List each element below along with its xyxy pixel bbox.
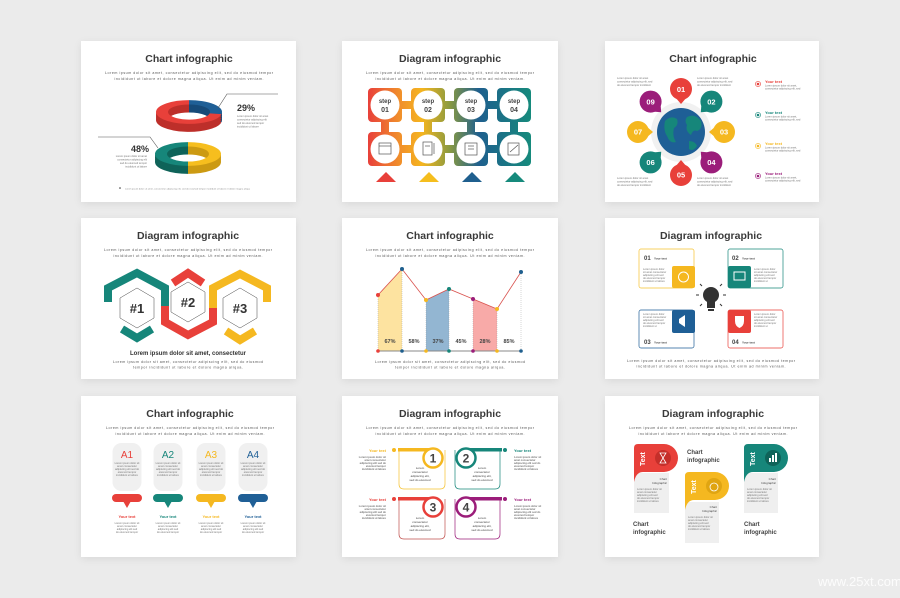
box 2: Lorem bbox=[478, 466, 487, 470]
body text: Lorem ipsum dolor sit amet, consectetur adipiscing elit, sed do eiusmod tempor bbox=[627, 359, 796, 363]
slide 7: A1-A4 chart bbox=[81, 396, 296, 557]
gray columns bbox=[634, 473, 778, 543]
box 1: Lorem bbox=[416, 466, 425, 470]
box 04: do eiusmod tempor bbox=[754, 321, 776, 325]
column A1 bbox=[112, 443, 142, 534]
body text: Lorem ipsum dolor sit amet, consectetur adipiscing elit, sed do eiusmod bbox=[375, 360, 525, 364]
intro text: Lorem ipsum dolor sit amet, consectetur adipiscing elit, sed do eiusmod tempor bbox=[366, 248, 535, 252]
body text bbox=[113, 360, 263, 370]
callout 48%: consectetur adipiscing elit bbox=[117, 158, 147, 162]
slide 9: tab diagram: do eiusmod tempor bbox=[637, 496, 659, 500]
box 4: sed do eiusmod bbox=[471, 528, 493, 532]
column A1: amet consectetur bbox=[117, 464, 137, 468]
box 04: Lorem ipsum dolor bbox=[754, 312, 776, 316]
intro text: incididunt ut labore et dolore magna aliqua. Ut enim ad minim veniam. bbox=[376, 77, 524, 81]
column A3: Your text bbox=[202, 514, 220, 519]
callout 29%: Lorem ipsum dolor sit amet bbox=[237, 114, 269, 118]
slide 9: tab diagram: incididunt ut labore bbox=[688, 527, 710, 531]
box 03: Your text bbox=[654, 340, 667, 344]
column texts bbox=[652, 477, 776, 513]
box 01: do eiusmod tempor bbox=[643, 276, 665, 280]
box 01: adipiscing elit sed bbox=[643, 273, 664, 277]
column A4: adipiscing elit sed bbox=[243, 527, 264, 531]
slide 9: tab diagram: amet consectetur bbox=[747, 490, 767, 494]
box 04: Your text bbox=[742, 340, 755, 344]
side labels: eiusmod tempor bbox=[366, 464, 386, 468]
numbered bubbles: 01 bbox=[677, 85, 685, 94]
body text bbox=[375, 360, 525, 370]
side labels: adipiscing elit sed do bbox=[360, 510, 386, 514]
body text bbox=[627, 359, 796, 368]
box 02 bbox=[728, 249, 783, 288]
percentage labels: 28% bbox=[479, 339, 491, 345]
column A1: Lorem ipsum dolor sit bbox=[115, 461, 140, 465]
chart infographic labels: infographic bbox=[633, 530, 666, 536]
intro text: incididunt ut labore et dolore magna aliqua. Ut enim ad minim veniam. bbox=[114, 77, 264, 81]
column A2: A2 bbox=[162, 450, 175, 461]
box 2: 2 bbox=[463, 452, 470, 466]
callout 48%: 48% bbox=[131, 144, 149, 154]
box 4 bbox=[455, 497, 507, 539]
slide 3: globe chart bbox=[605, 41, 819, 202]
legend list: Lorem ipsum dolor sit amet, bbox=[765, 176, 797, 180]
slide 9: tab diagram: adipiscing elit sed bbox=[688, 521, 709, 525]
step labels: step bbox=[422, 99, 434, 105]
subtitle: Lorem ipsum dolor sit amet, consectetur bbox=[130, 351, 247, 357]
side labels: Lorem ipsum dolor sit bbox=[359, 455, 386, 459]
column A2: amet consectetur bbox=[158, 464, 178, 468]
percentage labels: 45% bbox=[455, 339, 467, 345]
box 04: adipiscing elit sed bbox=[754, 318, 775, 322]
column A3: amet consectetur bbox=[201, 464, 221, 468]
column A2: amet consectetur bbox=[158, 524, 178, 528]
box 01: sit amet consectetur bbox=[643, 270, 666, 274]
step icons bbox=[379, 142, 519, 155]
intro text: incididunt ut labore et dolore magna aliqua. Ut enim ad minim veniam. bbox=[376, 254, 524, 258]
box 02: Your text bbox=[742, 256, 755, 260]
column A4: do eiusmod tempor bbox=[242, 530, 264, 534]
corner text blocks: Lorem ipsum dolor sit amet bbox=[617, 76, 649, 80]
side labels: eiusmod tempor bbox=[514, 464, 534, 468]
intro text: Lorem ipsum dolor sit amet, consectetur adipiscing elit, sed do eiusmod tempor bbox=[106, 426, 275, 430]
slide 9: tab diagram: do eiusmod tempor bbox=[688, 524, 710, 528]
column A3: eiusmod tempor bbox=[202, 470, 220, 474]
box 2 bbox=[455, 448, 507, 489]
box 03 bbox=[639, 310, 695, 348]
column A1: adipiscing elit sed do bbox=[115, 467, 140, 471]
box 3 bbox=[392, 497, 445, 539]
box 3: Lorem bbox=[416, 516, 425, 520]
slide 9: tab diagram: amet consectetur bbox=[637, 490, 657, 494]
title: Chart infographic bbox=[406, 230, 494, 242]
numbered bubbles: 07 bbox=[634, 128, 642, 137]
slide 1: ring chart infographic bbox=[81, 41, 296, 202]
column A2: do eiusmod tempor bbox=[157, 530, 179, 534]
column A3: adipiscing elit sed do bbox=[199, 467, 224, 471]
box 01 bbox=[639, 249, 695, 288]
intro text bbox=[366, 248, 535, 258]
watermark: www.25xt.com bbox=[818, 574, 900, 589]
numbered bubbles: 05 bbox=[677, 171, 685, 180]
body text: tempor incididunt ut labore et dolore magna aliqua. bbox=[133, 366, 243, 370]
column texts: Infographic bbox=[761, 481, 776, 485]
column A3: incididunt ut labore bbox=[200, 473, 222, 477]
side labels: incididunt ut labore bbox=[514, 467, 539, 471]
percentage labels bbox=[384, 339, 515, 345]
corner text blocks: consectetur adipiscing elit, sed bbox=[617, 80, 653, 84]
chart infographic labels: Chart bbox=[687, 450, 703, 456]
box 03: 03 bbox=[644, 340, 651, 346]
slide 2: step diagram bbox=[342, 41, 558, 202]
column A3: do eiusmod tempor bbox=[200, 530, 222, 534]
column A4: incididunt ut labore bbox=[242, 473, 264, 477]
corner text blocks: do eiusmod tempor incididunt bbox=[617, 83, 651, 87]
corner text blocks bbox=[617, 76, 733, 187]
side labels: Your text bbox=[514, 497, 532, 502]
intro text bbox=[366, 71, 535, 81]
percentage labels: 37% bbox=[432, 339, 444, 345]
box 03: adipiscing elit sed bbox=[643, 318, 664, 322]
legend list: Your text bbox=[765, 171, 783, 176]
numbered bubbles: 03 bbox=[720, 128, 728, 137]
yellow tab bbox=[685, 472, 729, 510]
box 02: 02 bbox=[732, 256, 739, 262]
box 2: sed do eiusmod bbox=[471, 478, 493, 482]
side labels: adipiscing elit sed do bbox=[514, 461, 541, 465]
title: Diagram infographic bbox=[660, 230, 762, 242]
intro text: incididunt ut labore et dolore magna aliqua. Ut enim ad minim veniam. bbox=[376, 432, 524, 436]
column texts: Chart bbox=[660, 477, 667, 481]
column A4: Lorem ipsum dolor sit bbox=[241, 521, 266, 525]
side labels: adipiscing elit sed do bbox=[360, 461, 386, 465]
red tab: Text bbox=[640, 451, 647, 466]
column A2: Lorem ipsum dolor sit bbox=[156, 521, 181, 525]
intro text: Lorem ipsum dolor sit amet, consectetur adipiscing elit, sed do eiusmod tempor bbox=[104, 248, 273, 252]
numbered bubbles: 09 bbox=[646, 97, 655, 106]
ring chart: teal/yellow 48% bbox=[161, 144, 215, 172]
intro text: Lorem ipsum dolor sit amet, consectetur adipiscing elit, sed do eiusmod tempor bbox=[366, 71, 535, 75]
side labels: amet consectetur bbox=[514, 507, 535, 511]
slide 5: area line chart bbox=[342, 218, 558, 379]
column A2: Your text bbox=[159, 514, 177, 519]
box 02: Lorem ipsum dolor bbox=[754, 267, 776, 271]
box 02: incididunt ut bbox=[754, 279, 768, 283]
legend list: Lorem ipsum dolor sit amet, bbox=[765, 146, 797, 150]
box 1: adipiscing elit, bbox=[411, 474, 430, 478]
legend list: consectetur adipiscing elit, sed bbox=[765, 178, 801, 182]
step tiles grid bbox=[368, 88, 531, 166]
side labels: amet consectetur bbox=[365, 458, 386, 462]
corner text blocks: do eiusmod tempor incididunt bbox=[617, 183, 651, 187]
column A1: Your text bbox=[118, 514, 136, 519]
column texts: Chart bbox=[769, 477, 776, 481]
slide 9: tab diagram: Lorem ipsum dolor sit bbox=[747, 487, 772, 491]
box 01: Lorem ipsum dolor bbox=[643, 267, 665, 271]
corner text blocks: do eiusmod tempor incididunt bbox=[697, 183, 731, 187]
corner text blocks: Lorem ipsum dolor sit amet bbox=[617, 176, 649, 180]
step labels: step bbox=[465, 99, 478, 105]
legend list: consectetur adipiscing elit, sed bbox=[765, 86, 801, 90]
numbered bubbles: 04 bbox=[707, 158, 716, 167]
legend list: Lorem ipsum dolor sit amet, bbox=[765, 114, 797, 118]
box 02: do eiusmod tempor bbox=[754, 276, 776, 280]
side labels: Lorem ipsum dolor sit bbox=[514, 455, 541, 459]
callout 29% bbox=[218, 94, 278, 128]
side labels: adipiscing elit sed do bbox=[514, 510, 541, 514]
slide 9: tab diagram bbox=[605, 396, 819, 557]
slide 9: tab diagram: Lorem ipsum dolor sit bbox=[637, 487, 662, 491]
box 2: consectetur bbox=[474, 470, 490, 474]
box 03: Lorem ipsum dolor bbox=[643, 312, 665, 316]
box 2: adipiscing elit, bbox=[473, 474, 492, 478]
percentage labels: 85% bbox=[503, 339, 515, 345]
box 03: sit amet consectetur bbox=[643, 315, 666, 319]
box 04 bbox=[728, 310, 783, 348]
side labels: incididunt ut labore bbox=[514, 516, 539, 520]
column A2: eiusmod tempor bbox=[159, 470, 177, 474]
column A1: Lorem ipsum dolor sit bbox=[115, 521, 140, 525]
box 3: sed do eiusmod bbox=[409, 528, 431, 532]
slide 9: tab diagram: incididunt ut labore bbox=[747, 499, 769, 503]
side labels: incididunt ut labore bbox=[362, 467, 387, 471]
body text: tempor incididunt ut labore et dolore magna aliqua. bbox=[395, 366, 505, 370]
column A4: Your text bbox=[244, 514, 262, 519]
numbered bubbles bbox=[627, 78, 735, 186]
triangles bbox=[376, 172, 525, 182]
side labels: incididunt ut labore bbox=[362, 516, 387, 520]
column A2: adipiscing elit sed bbox=[158, 527, 179, 531]
box 4: adipiscing elit, bbox=[473, 524, 492, 528]
corner text blocks: do eiusmod tempor incididunt bbox=[697, 83, 731, 87]
percentage labels: 58% bbox=[408, 339, 420, 345]
teal tab: Text bbox=[750, 451, 757, 466]
box 02: adipiscing elit sed bbox=[754, 273, 775, 277]
box 03: do eiusmod tempor bbox=[643, 321, 665, 325]
callout 48%: sed do eiusmod tempor bbox=[120, 161, 147, 165]
line chart bbox=[376, 267, 523, 353]
red tab bbox=[634, 444, 678, 482]
numbered bubbles: 02 bbox=[707, 97, 716, 106]
intro text bbox=[366, 426, 535, 436]
column A1: incididunt ut labore bbox=[116, 473, 138, 477]
side labels: Your text bbox=[514, 448, 532, 453]
slide 9: tab diagram: Lorem ipsum dolor sit bbox=[688, 515, 713, 519]
box 1: sed do eiusmod bbox=[409, 478, 431, 482]
chart infographic labels: infographic bbox=[744, 530, 777, 536]
title: Diagram infographic bbox=[399, 408, 501, 420]
column A3 bbox=[196, 443, 226, 534]
slide 9: tab diagram: amet consectetur bbox=[688, 518, 708, 522]
column A4: eiusmod tempor bbox=[244, 470, 262, 474]
slide 6: four box diagram with bulb bbox=[605, 218, 819, 379]
box 01: Your text bbox=[654, 256, 667, 260]
box 04: incididunt ut bbox=[754, 324, 768, 328]
step labels bbox=[379, 99, 520, 114]
callout 29%: incididunt ut labore bbox=[237, 124, 259, 128]
chart infographic labels: Chart bbox=[744, 522, 760, 528]
legend list: consectetur adipiscing elit, sed bbox=[765, 118, 801, 122]
corner text blocks: consectetur adipiscing elit, sed bbox=[617, 180, 653, 184]
slide 8: numbered boxes diagram bbox=[342, 396, 558, 557]
column A3: adipiscing elit sed bbox=[201, 527, 222, 531]
chart infographic labels: Chart bbox=[633, 522, 649, 528]
title: Chart infographic bbox=[145, 53, 233, 65]
column A2: Lorem ipsum dolor sit bbox=[156, 461, 181, 465]
legend list: Your text bbox=[765, 110, 783, 115]
intro text bbox=[629, 426, 798, 436]
column A1: A1 bbox=[121, 450, 134, 461]
title: Chart infographic bbox=[669, 53, 757, 65]
column A4: amet consectetur bbox=[243, 524, 263, 528]
title: Diagram infographic bbox=[662, 408, 764, 420]
corner text blocks: consectetur adipiscing elit, sed bbox=[697, 80, 733, 84]
column A4: Lorem ipsum dolor sit bbox=[241, 461, 266, 465]
legend list: Your text bbox=[765, 79, 783, 84]
callout 29%: 29% bbox=[237, 103, 255, 113]
column A1: amet consectetur bbox=[117, 524, 137, 528]
side labels: Your text bbox=[369, 497, 387, 502]
chart infographic labels: infographic bbox=[687, 458, 720, 464]
percentage labels: 67% bbox=[384, 339, 396, 345]
column A1: eiusmod tempor bbox=[118, 470, 136, 474]
callout 29%: sed do eiusmod tempor bbox=[237, 121, 264, 125]
callout 29%: consectetur adipiscing elit bbox=[237, 118, 267, 122]
callout 48%: incididunt ut labore bbox=[125, 164, 148, 168]
callout 48% bbox=[98, 137, 158, 168]
box 01: 01 bbox=[644, 256, 651, 262]
title: Chart infographic bbox=[146, 408, 234, 420]
hexagon labels: #2 bbox=[181, 295, 195, 310]
intro text: incididunt ut labore et dolore magna aliqua. Ut enim ad minim veniam. bbox=[638, 432, 788, 436]
teal tab bbox=[744, 444, 788, 482]
body text: Lorem ipsum dolor sit amet, consectetur adipiscing elit, sed do eiusmod bbox=[113, 360, 263, 364]
column A2: incididunt ut labore bbox=[157, 473, 179, 477]
side labels: Your text bbox=[369, 448, 387, 453]
step labels: 04 bbox=[510, 107, 518, 114]
icon: light bulb bbox=[696, 284, 726, 311]
side labels: amet consectetur bbox=[514, 458, 535, 462]
legend list: Lorem ipsum dolor sit amet, bbox=[765, 84, 797, 88]
box 02: sit amet consectetur bbox=[754, 270, 777, 274]
slide 4: hexagon diagram bbox=[81, 218, 296, 379]
box 4: consectetur bbox=[474, 520, 490, 524]
column A1: do eiusmod tempor bbox=[116, 530, 138, 534]
side labels: Lorem ipsum dolor sit bbox=[359, 504, 386, 508]
step labels: 02 bbox=[424, 107, 432, 114]
column texts: Infographic bbox=[652, 481, 667, 485]
hexagon labels: #3 bbox=[233, 301, 247, 316]
side labels bbox=[359, 448, 541, 520]
box 04: sit amet consectetur bbox=[754, 315, 777, 319]
column A4: A4 bbox=[247, 450, 260, 461]
box 04: 04 bbox=[732, 340, 739, 346]
side labels: eiusmod tempor bbox=[366, 513, 386, 517]
box 1: consectetur bbox=[412, 470, 428, 474]
title: Diagram infographic bbox=[399, 53, 501, 65]
intro text: Lorem ipsum dolor sit amet, consectetur adipiscing elit, sed do eiusmod tempor bbox=[366, 426, 535, 430]
side labels: Lorem ipsum dolor sit bbox=[514, 504, 541, 508]
step labels: 01 bbox=[381, 107, 389, 114]
column A3: Lorem ipsum dolor sit bbox=[199, 461, 224, 465]
column texts: Infographic bbox=[702, 509, 717, 513]
box 4: 4 bbox=[463, 500, 470, 514]
box 1: 1 bbox=[430, 452, 437, 466]
chart infographic labels bbox=[633, 450, 777, 536]
box 3: adipiscing elit, bbox=[411, 524, 430, 528]
footnote: Lorem ipsum dolor sit amet, consectetur adipiscing elit, sed do eiusmod tempor incididunt ut labore et dolore magna aliqua bbox=[125, 188, 251, 190]
step labels: step bbox=[379, 99, 392, 105]
body text: incididunt ut labore et dolore magna aliqua. Ut enim ad minim veniam. bbox=[636, 364, 786, 368]
corner text blocks: Lorem ipsum dolor sit amet bbox=[697, 176, 729, 180]
slide 9: tab diagram: do eiusmod tempor bbox=[747, 496, 769, 500]
intro text: Lorem ipsum dolor sit amet, consectetur adipiscing elit, sed do eiusmod tempor bbox=[629, 426, 798, 430]
legend list: consectetur adipiscing elit, sed bbox=[765, 148, 801, 152]
column A4 bbox=[238, 443, 268, 534]
step circles bbox=[370, 90, 528, 164]
box 3: 3 bbox=[430, 500, 437, 514]
hexagon labels bbox=[120, 282, 257, 328]
footnote bbox=[119, 187, 251, 190]
slide 9: tab diagram: adipiscing elit sed bbox=[747, 493, 768, 497]
slide 9: tab diagram: incididunt ut labore bbox=[637, 499, 659, 503]
intro text: Lorem ipsum dolor sit amet, consectetur adipiscing elit, sed do eiusmod tempor bbox=[105, 71, 274, 75]
column texts: Chart bbox=[710, 505, 717, 509]
hexagon bands bbox=[108, 273, 267, 340]
step labels: 03 bbox=[467, 107, 475, 114]
column A2: adipiscing elit sed do bbox=[156, 467, 181, 471]
intro text: incididunt ut labore et dolore magna aliqua. Ut enim ad minim veniam. bbox=[114, 254, 262, 258]
box 03: incididunt ut bbox=[643, 324, 657, 328]
slide 9: tab diagram: adipiscing elit sed bbox=[637, 493, 658, 497]
box 1 bbox=[392, 448, 445, 489]
box 3: consectetur bbox=[412, 520, 428, 524]
column A1: adipiscing elit sed bbox=[117, 527, 138, 531]
yellow tab: Text bbox=[691, 479, 698, 494]
globe bbox=[651, 102, 711, 162]
intro text bbox=[104, 248, 273, 258]
intro text bbox=[105, 71, 274, 81]
title: Diagram infographic bbox=[137, 230, 239, 242]
intro text bbox=[106, 426, 275, 436]
legend list: Your text bbox=[765, 141, 783, 146]
column A3: A3 bbox=[205, 450, 218, 461]
corner text blocks: consectetur adipiscing elit, sed bbox=[697, 180, 733, 184]
numbered bubbles: 06 bbox=[646, 158, 655, 167]
side labels: amet consectetur bbox=[365, 507, 386, 511]
column A4: adipiscing elit sed do bbox=[241, 467, 266, 471]
column A4: amet consectetur bbox=[243, 464, 263, 468]
step labels: step bbox=[508, 99, 520, 105]
legend list bbox=[755, 79, 801, 182]
callout 48%: Lorem ipsum dolor sit amet bbox=[116, 154, 147, 158]
side labels: eiusmod tempor bbox=[514, 513, 534, 517]
box 4: Lorem bbox=[478, 516, 487, 520]
column A3: Lorem ipsum dolor sit bbox=[199, 521, 224, 525]
intro text: incididunt ut labore et dolore magna aliqua. Ut enim ad minim veniam. bbox=[116, 432, 264, 436]
corner text blocks: Lorem ipsum dolor sit amet bbox=[697, 76, 729, 80]
column A2 bbox=[153, 443, 183, 534]
ring chart: red/blue 29% bbox=[162, 102, 216, 130]
box 01: incididunt ut labore bbox=[643, 279, 665, 283]
column A3: amet consectetur bbox=[201, 524, 221, 528]
hexagon labels: #1 bbox=[130, 301, 144, 316]
